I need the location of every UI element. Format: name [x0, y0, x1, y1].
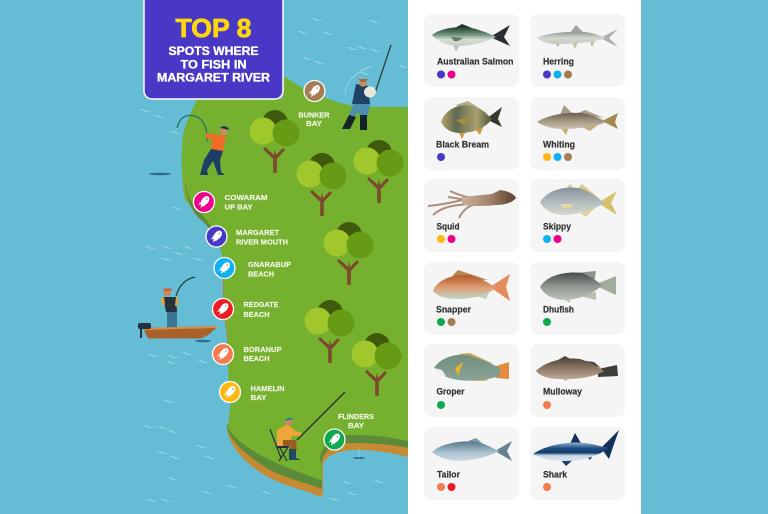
fish: Shark — [533, 430, 619, 466]
fish: Black Bream — [441, 101, 502, 139]
land: coastline — [182, 75, 408, 497]
label: Hamelin Bay: BAY — [250, 393, 266, 402]
subtitle: MARGARET RIVER — [157, 70, 270, 84]
label: Redgate Beach: BEACH — [244, 310, 270, 319]
location pin: Flinders Bay — [324, 429, 345, 450]
card: Mulloway — [530, 344, 625, 417]
angler: top right — [342, 45, 391, 130]
label: Margaret River Mouth: MARGARET — [236, 228, 279, 237]
card: Shark — [530, 427, 625, 500]
title: top 8: TOP 8 — [176, 13, 252, 43]
region dots — [543, 235, 562, 243]
region dots — [543, 70, 572, 78]
subtitle: SPOTS WHERE — [168, 44, 258, 58]
name: Herring — [543, 56, 574, 66]
location pin: Hamelin Bay — [220, 382, 240, 402]
card: Australian Salmon — [424, 14, 519, 87]
region dots — [543, 318, 551, 326]
title card — [144, 0, 283, 99]
angler: orange shirt — [149, 115, 229, 175]
name: Mulloway — [543, 386, 582, 396]
name: Groper — [436, 386, 465, 396]
region dots — [437, 401, 445, 409]
label: Bunker Bay: BAY — [306, 119, 322, 128]
location pin: Cowaram Up Bay — [194, 192, 214, 212]
region dots — [543, 401, 551, 409]
label: Gnarabup Beach: BEACH — [248, 270, 274, 278]
white fish panel — [408, 0, 641, 514]
location pin: Margaret River Mouth — [206, 226, 227, 247]
fish: Dhufish — [540, 271, 616, 303]
label: Bunker Bay: BUNKER — [298, 110, 330, 120]
location pin: Bunker Bay — [304, 80, 325, 102]
region dots — [543, 483, 551, 491]
card: Skippy — [530, 179, 625, 252]
name: Shark — [543, 470, 568, 480]
label: Boranup Beach: BORANUP — [244, 345, 282, 354]
fish: Squid — [428, 190, 516, 218]
region dots — [437, 70, 456, 78]
label: Boranup Beach: BEACH — [244, 354, 270, 363]
card: Black Bream — [424, 97, 519, 170]
card: Squid — [424, 179, 519, 252]
card: Tailor — [424, 427, 519, 500]
label: Cowaram Up Bay: UP BAY — [224, 202, 252, 212]
fish: Skippy — [540, 184, 617, 217]
label: Cowaram Up Bay: COWARAM — [224, 193, 268, 202]
location pin: Boranup Beach — [212, 344, 234, 364]
location pin: Gnarabup Beach — [214, 258, 235, 278]
label: Flinders Bay: BAY — [348, 421, 364, 430]
name: Squid — [436, 222, 460, 232]
label: Flinders Bay: FLINDERS — [338, 412, 374, 421]
fish: Groper — [434, 353, 509, 381]
name: Skippy — [543, 222, 571, 232]
region dots — [437, 235, 456, 243]
label: Redgate Beach: REDGATE — [244, 300, 278, 309]
name: Tailor — [437, 470, 460, 480]
location pin: Redgate Beach — [212, 298, 234, 320]
label: Hamelin Bay: HAMELIN — [250, 384, 284, 393]
card: Snapper — [424, 262, 519, 335]
fish: Snapper — [433, 270, 510, 301]
card: Dhufish — [530, 262, 625, 335]
label: Gnarabup Beach: GNARABUP — [248, 260, 291, 269]
angler: boat — [138, 277, 218, 342]
region dots — [437, 318, 456, 326]
region dots — [437, 153, 445, 161]
fish: Mulloway — [536, 356, 618, 381]
subtitle: TO FISH IN — [180, 58, 246, 72]
name: Dhufish — [543, 304, 574, 314]
name: Whiting — [543, 140, 575, 150]
angler: seated on chair — [270, 392, 365, 461]
water ripples — [138, 18, 410, 502]
name: Australian Salmon — [437, 56, 514, 66]
card: Herring — [530, 14, 625, 87]
region dots — [543, 153, 572, 161]
fish: Herring — [537, 25, 618, 49]
fish: Australian Salmon — [432, 24, 510, 52]
region dots — [437, 483, 456, 491]
fish: Tailor — [432, 438, 512, 461]
label: Margaret River Mouth: RIVER MOUTH — [236, 238, 288, 246]
name: Snapper — [436, 304, 471, 314]
name: Black Bream — [436, 140, 489, 150]
fish: Whiting — [537, 105, 618, 135]
trees — [250, 110, 404, 396]
card: Whiting — [530, 97, 625, 170]
card: Groper — [424, 344, 519, 417]
